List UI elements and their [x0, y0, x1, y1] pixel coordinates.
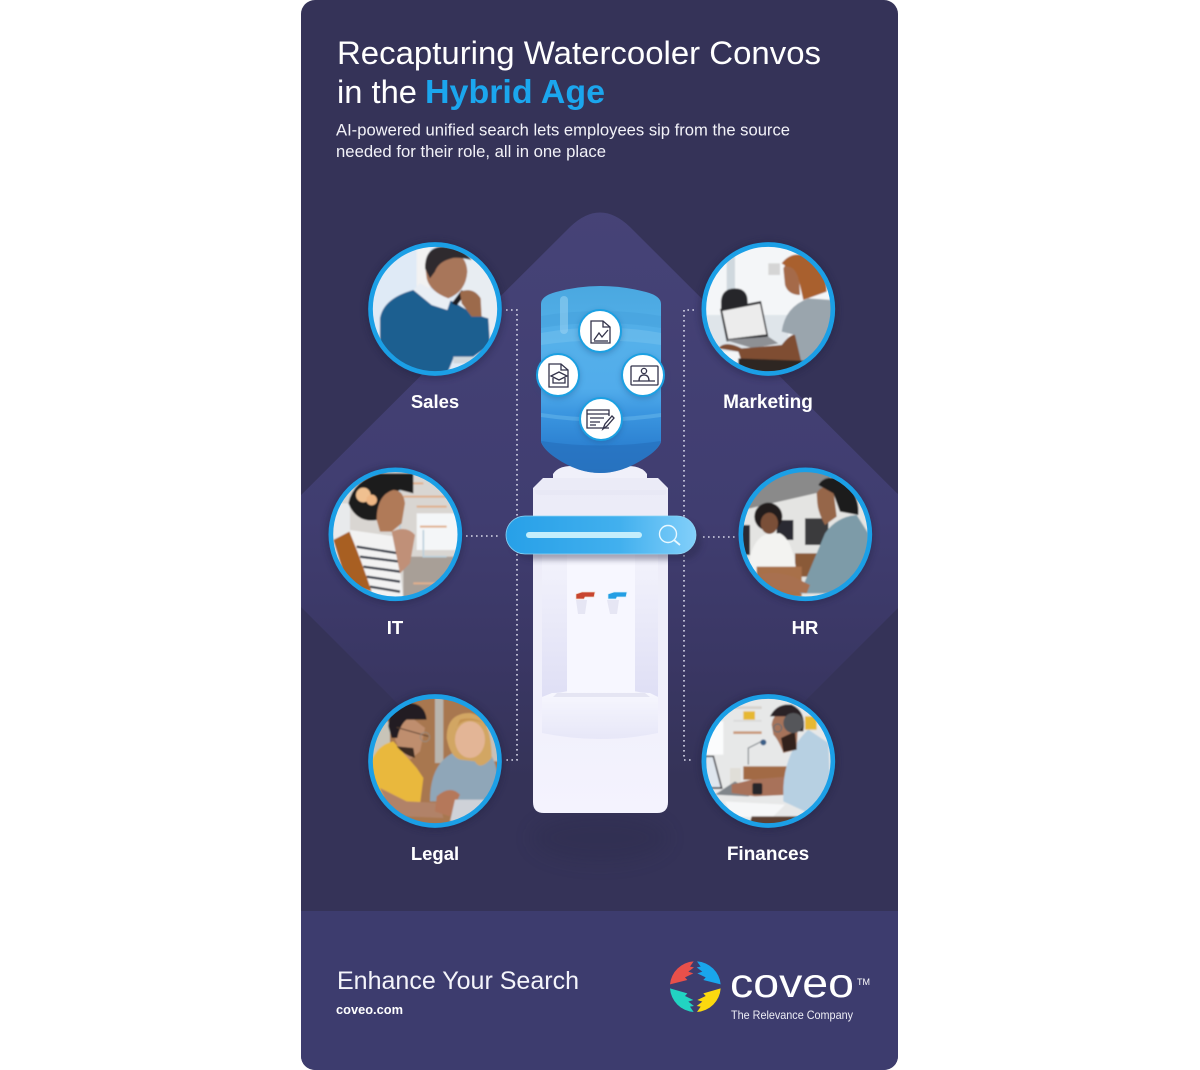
footer heading: Enhance Your Search — [337, 967, 579, 995]
water cooler — [506, 286, 702, 813]
dotted connector lines — [466, 310, 737, 760]
tagline: The Relevance Company — [731, 1008, 853, 1022]
photo: legal — [368, 693, 508, 828]
footer url: coveo.com — [336, 1002, 403, 1017]
title — [337, 35, 821, 110]
title: Hybrid Age — [425, 73, 605, 110]
subtitle — [336, 122, 790, 161]
faucets — [576, 592, 627, 614]
photo: sales — [368, 242, 508, 380]
icon: report chart — [578, 310, 622, 355]
coveo logo — [670, 960, 870, 1022]
icon: presenter screen — [621, 354, 665, 399]
label: HR: HR — [792, 617, 818, 638]
photo: finances — [702, 693, 836, 828]
subtitle: AI-powered unified search lets employees sip from the source — [336, 122, 790, 140]
panel: background — [301, 0, 898, 1070]
logo mark — [670, 961, 721, 1012]
label: Finances: Finances — [727, 844, 809, 865]
title: in the — [337, 74, 417, 110]
label: Sales: Sales — [411, 391, 459, 412]
photo: IT — [326, 465, 468, 604]
label: Marketing: Marketing — [723, 392, 813, 413]
wordmark: coveo — [730, 960, 854, 1006]
trademark: TM — [857, 977, 870, 988]
photo: HR — [733, 465, 874, 604]
icon: form and pencil — [579, 398, 623, 443]
search bar — [506, 516, 702, 560]
label: Legal: Legal — [411, 843, 459, 864]
water bottle — [541, 286, 661, 473]
photo: marketing — [698, 242, 836, 380]
title: Recapturing Watercooler Convos — [337, 35, 821, 71]
icon: education document — [536, 354, 580, 399]
subtitle: needed for their role, all in one place — [336, 143, 606, 161]
label: IT: IT — [387, 617, 404, 638]
infographic — [301, 0, 898, 1070]
cooler body — [533, 466, 668, 813]
